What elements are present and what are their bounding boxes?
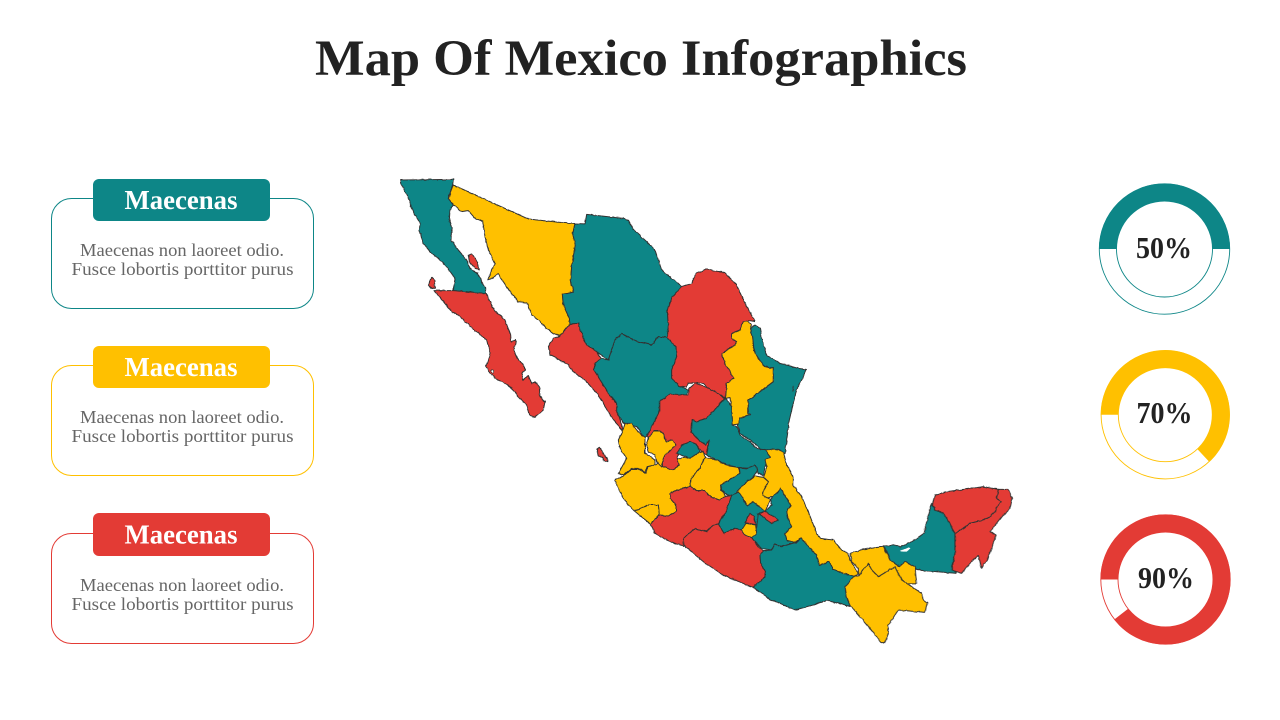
state: Jalisco (615, 452, 705, 516)
state: Sinaloa (548, 323, 624, 432)
state: Colima (634, 505, 659, 524)
southeast states (845, 487, 1012, 643)
text block: teal card: Fusce lobortis porttitor purus (72, 259, 294, 279)
lagoon mark: Tamaulipas (792, 385, 793, 391)
donut chart: 50%: 50% (1136, 230, 1192, 265)
state: Mexico (718, 492, 765, 538)
state: Mexico City (745, 513, 756, 525)
panel: red card (52, 513, 314, 644)
state: Guerrero (683, 524, 765, 587)
hole: Baja California Sur lagoon (491, 369, 494, 373)
badge: yellow: Maecenas (124, 352, 238, 382)
text block: teal card: Maecenas non laoreet odio. (80, 240, 284, 260)
text block: red card (72, 575, 294, 614)
state: Chihuahua (562, 214, 682, 360)
island: Angel de la Guarda (468, 254, 479, 269)
badge: teal: Maecenas (124, 185, 238, 215)
lagoon: Terminos (900, 547, 911, 552)
donut chart: 70%: 70% (1136, 395, 1192, 430)
text block: red card: Maecenas non laoreet odio. (80, 575, 284, 595)
state: Durango (594, 333, 688, 438)
state: Hidalgo (737, 476, 771, 512)
state: Quintana Roo (952, 489, 1012, 573)
state: San Luis Potosi (691, 398, 770, 476)
text block: teal card (72, 240, 294, 279)
state: Nayarit (618, 423, 655, 475)
state: Michoacan (651, 487, 732, 546)
donut chart: 50% (1099, 184, 1230, 314)
northwest states (401, 179, 688, 438)
badge: red: Maecenas (124, 520, 238, 550)
panel: teal card (52, 179, 314, 308)
state: Tamaulipas (737, 325, 806, 453)
state: Morelos (742, 523, 757, 538)
text block: yellow card: Maecenas non laoreet odio. (80, 407, 284, 427)
state: Campeche (884, 503, 957, 573)
state: Tabasco (850, 547, 917, 583)
text block: red card: Fusce lobortis porttitor purus (72, 594, 294, 614)
text block: yellow card (72, 407, 294, 446)
state: Coahuila (667, 269, 755, 398)
state: Baja California (401, 179, 486, 293)
state: Veracruz (763, 449, 858, 576)
title: Map Of Mexico Infographics (315, 31, 967, 87)
badge: yellow (93, 346, 270, 388)
state: Aguascalientes (677, 442, 700, 458)
island: Cedros (428, 277, 435, 288)
panel: yellow card (52, 346, 314, 476)
central states (597, 383, 858, 610)
state: Nuevo Leon (722, 321, 773, 425)
donut chart: 90% (1100, 514, 1230, 644)
state: Jalisco north lobe (646, 431, 676, 467)
state: Puebla (750, 488, 795, 550)
donut chart: 70% (1101, 350, 1230, 479)
state: Queretaro (721, 465, 758, 496)
state: Yucatan (933, 487, 1001, 534)
state: Guanajuato (691, 457, 740, 500)
badge: teal (93, 179, 270, 221)
northeast states (667, 269, 806, 453)
text block: yellow card: Fusce lobortis porttitor purus (72, 426, 294, 446)
state: Chiapas (845, 563, 927, 643)
state: Sonora (448, 185, 575, 336)
badge: red (93, 513, 270, 556)
donut chart: 90%: 90% (1138, 560, 1194, 595)
state: Baja California Sur (434, 291, 545, 417)
state: Zacatecas (647, 383, 725, 470)
islands: Marias (597, 447, 607, 462)
map of Mexico (401, 179, 1012, 643)
state: Tlaxcala (758, 512, 778, 523)
state: Oaxaca (753, 538, 855, 610)
